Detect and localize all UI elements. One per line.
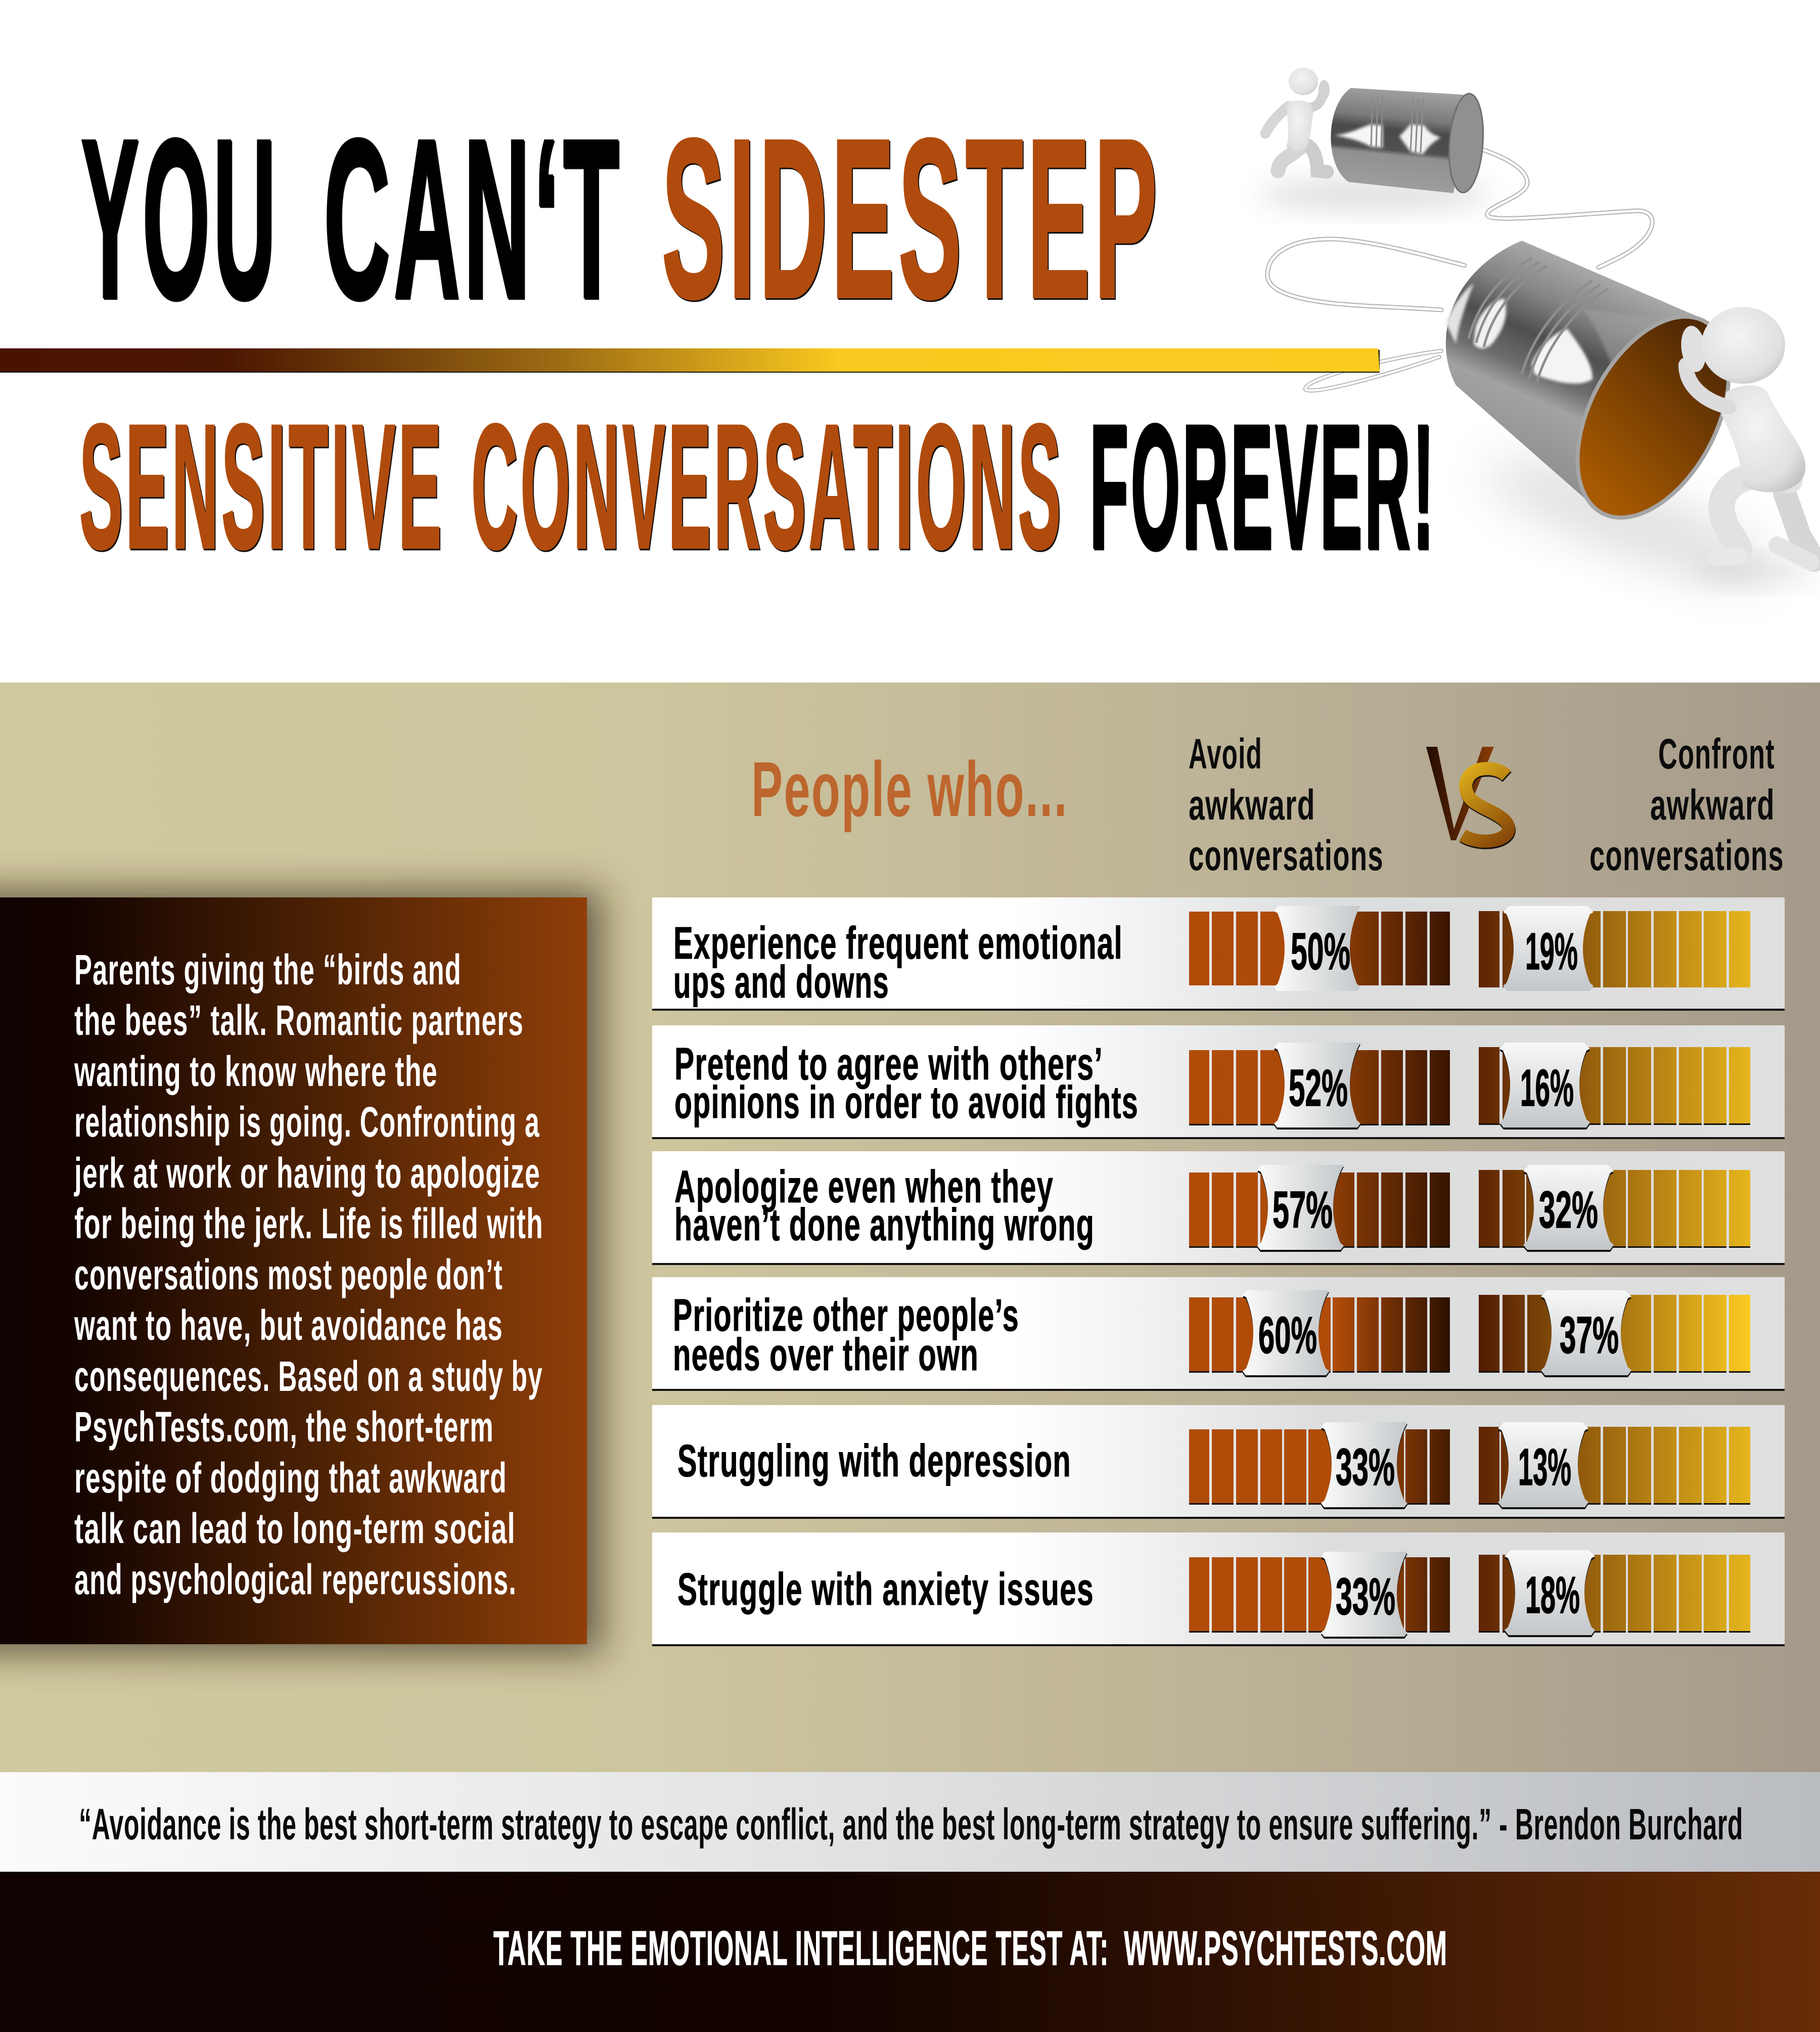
- row 1 avoid gauge 50%: [1189, 906, 1450, 991]
- row 4 label: Prioritize other people’s: [673, 1290, 1019, 1341]
- can opening: [1546, 291, 1760, 543]
- can ridges: [1469, 258, 1608, 382]
- illustration: tin can telephone: [1259, 68, 1820, 606]
- intro paragraph: Parents giving the “birds and: [74, 946, 462, 994]
- row 1 confront gauge 19%: 19%: [1525, 922, 1578, 980]
- row 3 label: haven’t done anything wrong: [674, 1200, 1095, 1250]
- intro paragraph: want to have, but avoidance has: [74, 1301, 503, 1349]
- row 3: [652, 1151, 1785, 1265]
- row 3 confront gauge 32%: 32%: [1539, 1181, 1598, 1239]
- shadow under cans: [1259, 179, 1820, 606]
- row 6 label: Struggle with anxiety issues: [677, 1564, 1094, 1615]
- footer band: [0, 1872, 1820, 2032]
- intro paragraph: relationship is going. Confronting a: [74, 1098, 540, 1146]
- row 4 avoid gauge 60%: [1189, 1290, 1450, 1377]
- icon: versus mark: [1426, 747, 1509, 843]
- title line 1: [81, 92, 1161, 345]
- row 4 avoid gauge 60%: 60%: [1258, 1306, 1317, 1364]
- intro panel shadow: [0, 890, 602, 1653]
- row 2 confront gauge 16%: 16%: [1520, 1059, 1574, 1117]
- intro paragraph: the bees” talk. Romantic partners: [74, 997, 524, 1044]
- row 5 confront gauge 13%: [1479, 1422, 1750, 1509]
- row 6 avoid gauge 33%: 33%: [1336, 1567, 1395, 1625]
- row 2: [652, 1025, 1785, 1139]
- row 5 avoid gauge 33%: [1189, 1422, 1450, 1509]
- intro paragraph: wanting to know where the: [74, 1048, 438, 1095]
- heading: people who: People who...: [751, 746, 1068, 833]
- row 4 label: needs over their own: [673, 1330, 979, 1380]
- column heading: avoid: Avoid: [1189, 730, 1262, 778]
- gradient divider bar: [0, 348, 1380, 373]
- row 2 avoid gauge 52%: 52%: [1289, 1059, 1348, 1117]
- big figure: [1678, 307, 1814, 562]
- column heading: avoid: [1189, 730, 1384, 879]
- row 6 confront gauge 18%: 18%: [1525, 1566, 1580, 1624]
- row 4: [652, 1277, 1785, 1391]
- can highlights: [1446, 283, 1689, 384]
- string connecting cans: [1267, 145, 1652, 390]
- title line 2: SENSITIVE: [79, 388, 444, 585]
- row 3 confront gauge 32%: [1479, 1165, 1750, 1252]
- row 6 confront gauge 18%: [1479, 1550, 1750, 1637]
- row 4 confront gauge 37%: [1479, 1290, 1750, 1377]
- intro paragraph: jerk at work or having to apologize: [74, 1149, 540, 1197]
- row 2 label: opinions in order to avoid fights: [674, 1077, 1139, 1128]
- beige content panel: [0, 683, 1820, 1772]
- intro paragraph: [74, 946, 543, 1603]
- title line 1: YOU: [81, 92, 279, 345]
- small figure: [1265, 68, 1330, 172]
- intro paragraph: PsychTests.com, the short-term: [74, 1403, 494, 1451]
- row 2 label: Pretend to agree with others’: [674, 1039, 1103, 1090]
- row 4 confront gauge 37%: 37%: [1560, 1306, 1619, 1364]
- small can: [1331, 88, 1486, 194]
- row 1 label: [673, 918, 1123, 1008]
- row 3 avoid gauge 57%: [1189, 1165, 1450, 1252]
- big can: [1446, 241, 1760, 543]
- row 1 avoid gauge 50%: 50%: [1291, 922, 1350, 980]
- quote strip: [0, 1772, 1820, 1872]
- row 5 confront gauge 13%: 13%: [1518, 1438, 1571, 1496]
- intro paragraph: and psychological repercussions.: [74, 1556, 517, 1603]
- row 3 label: Apologize even when they: [674, 1162, 1054, 1212]
- row 1 label: ups and downs: [673, 957, 889, 1008]
- title line 1: CAN‘T: [324, 92, 623, 345]
- row 6 avoid gauge 33%: [1189, 1552, 1450, 1639]
- intro paragraph: talk can lead to long-term social: [74, 1505, 516, 1552]
- intro paragraph: for being the jerk. Life is filled with: [74, 1200, 543, 1247]
- column heading: avoid: conversations: [1189, 832, 1384, 879]
- intro paragraph: respite of dodging that awkward: [74, 1454, 507, 1502]
- row 1 label: Experience frequent emotional: [673, 918, 1123, 969]
- intro paragraph: conversations most people don’t: [74, 1251, 503, 1298]
- row 1: [652, 897, 1785, 1011]
- column heading: confront: [1589, 730, 1784, 879]
- row 6: [652, 1532, 1785, 1646]
- row 4 label: [673, 1290, 1019, 1380]
- row 1 confront gauge 19%: [1479, 906, 1750, 991]
- column heading: avoid: awkward: [1189, 781, 1315, 829]
- row 5: [652, 1405, 1785, 1519]
- row 2 label: [674, 1039, 1139, 1128]
- row 5 avoid gauge 33%: 33%: [1336, 1438, 1395, 1496]
- row 5 label: Struggling with depression: [677, 1436, 1071, 1486]
- row 2 avoid gauge 52%: [1189, 1043, 1450, 1130]
- panel: intro text: [0, 897, 587, 1644]
- row 3 label: [674, 1162, 1095, 1250]
- row 3 avoid gauge 57%: 57%: [1272, 1181, 1333, 1239]
- row 2 confront gauge 16%: [1479, 1043, 1750, 1130]
- intro paragraph: consequences. Based on a study by: [74, 1352, 543, 1400]
